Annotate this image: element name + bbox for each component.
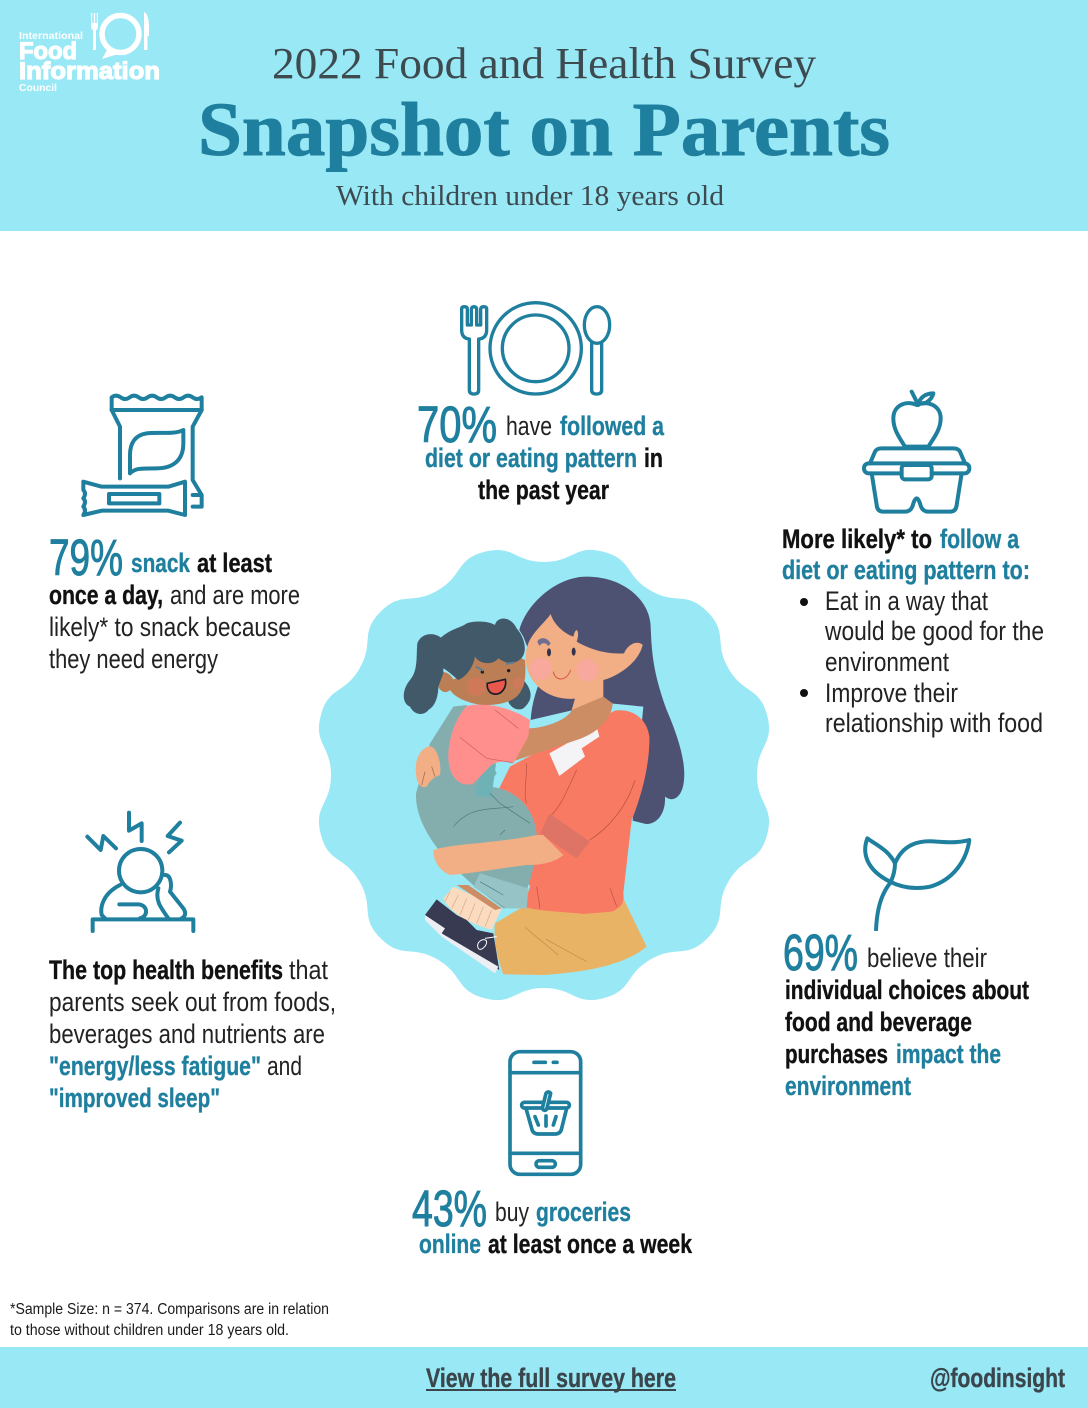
icon: plate, fork and spoon: [462, 303, 610, 394]
icon: phone with shopping basket: [510, 1052, 581, 1174]
footnote: to those without children under 18 years old.: [10, 1322, 289, 1339]
stat text: at least once a week: [488, 1229, 692, 1259]
stat text: they need energy: [49, 644, 219, 674]
child's ponytail: [404, 634, 443, 714]
wavy background blob: [296, 527, 792, 1023]
stat text: 43%: [412, 1180, 487, 1237]
child's facial features: [487, 679, 506, 694]
stat text: [417, 396, 664, 505]
bullet list: would be good for the: [824, 616, 1044, 646]
logo: International Food Information Council: [19, 12, 160, 94]
child's arm around mother's neck: [515, 697, 613, 761]
mother's sweater: [497, 710, 649, 914]
stat text: The top health benefits: [49, 955, 283, 985]
stat text: parents seek out from foods,: [49, 987, 336, 1017]
footnote: [10, 1301, 329, 1339]
stat text: buy: [495, 1197, 530, 1227]
icon: tired person at desk: [87, 813, 193, 931]
mother's face and neck: [526, 614, 643, 713]
footer band: [0, 1347, 1088, 1408]
stat text: individual choices about: [785, 975, 1029, 1005]
stat text: followed a: [560, 411, 664, 441]
stat text: online: [419, 1229, 481, 1259]
stat text: food and beverage: [785, 1007, 972, 1037]
subtitle: With children under 18 years old: [336, 181, 724, 212]
item: environment statistic: [783, 838, 1029, 1101]
child's main hair: [438, 619, 525, 680]
child's socks: [443, 887, 502, 930]
list heading: [782, 524, 1030, 585]
stat text: [49, 955, 336, 1113]
stat text: beverages and nutrients are: [49, 1019, 325, 1049]
stat text: "improved sleep": [49, 1083, 220, 1113]
stat text: and are more: [170, 580, 300, 610]
stat text: "energy/less fatigue": [49, 1051, 261, 1081]
main heading: Snapshot on Parents: [198, 88, 890, 172]
mother's skirt: [495, 898, 647, 975]
bullet list: Eat in a way that: [825, 586, 989, 616]
stat text: once a day,: [49, 580, 163, 610]
stat text: and: [267, 1051, 302, 1081]
item: diet statistic: [417, 303, 664, 505]
stat text: that: [289, 955, 329, 985]
logo: International Food Information Council: Information: [19, 58, 160, 85]
stat text: diet or eating pattern: [425, 443, 637, 473]
stat text: in: [644, 443, 663, 473]
list heading: diet or eating pattern to:: [782, 555, 1030, 585]
logo: International Food Information Council: Food: [19, 38, 77, 65]
stat text: snack: [131, 548, 190, 578]
child's hand: [416, 747, 440, 787]
logo: International Food Information Council: Council: [19, 83, 57, 94]
white collar: [549, 727, 599, 776]
list heading: follow a: [940, 524, 1019, 554]
stat text: 69%: [783, 924, 858, 981]
stat text: likely* to snack because: [49, 612, 291, 642]
survey title: 2022 Food and Health Survey: [272, 39, 816, 88]
stat text: [412, 1180, 692, 1259]
item: snack statistic: [49, 396, 300, 674]
child's face: [436, 653, 525, 705]
icon: apple on lunchbox: [864, 392, 969, 512]
stat text: believe their: [867, 943, 987, 973]
child's shoes: [425, 899, 499, 970]
item: more likely list: [782, 392, 1044, 738]
stat text: [49, 529, 300, 674]
link: view the full survey: View the full survey here: [426, 1363, 676, 1393]
stat text: 79%: [49, 529, 123, 586]
stat text: the past year: [478, 475, 609, 505]
bullet list: environment: [825, 647, 950, 677]
icon: snack bag and bar: [83, 396, 202, 515]
stat text: environment: [785, 1071, 911, 1101]
bullet list: Improve their: [825, 678, 958, 708]
stat text: groceries: [536, 1197, 631, 1227]
child's hair back tuft: [508, 680, 531, 709]
item: online groceries statistic: [412, 1052, 692, 1259]
item: health benefits: [49, 813, 336, 1113]
list heading: More likely* to: [782, 524, 932, 554]
mother's arm holding child: [433, 835, 563, 875]
sweater cuff: [540, 813, 590, 858]
child's pink shirt: [448, 704, 530, 784]
bullet list: relationship with food: [825, 708, 1043, 738]
stat text: 70%: [417, 396, 497, 453]
stat text: have: [506, 411, 552, 441]
icon: sprout: [865, 838, 969, 931]
child's overalls: [416, 705, 537, 908]
stat text: impact the: [896, 1039, 1001, 1069]
stat text: at least: [197, 548, 272, 578]
header band: [0, 0, 1088, 231]
mother's back hair: [519, 577, 684, 824]
stat text: purchases: [785, 1039, 888, 1069]
stat text: [783, 924, 1029, 1101]
illustration: mother hugging child: [404, 577, 684, 975]
logo: International Food Information Council: International: [19, 31, 83, 42]
bullet list: [800, 586, 1044, 738]
footnote: *Sample Size: n = 374. Comparisons are in relation: [10, 1301, 329, 1318]
